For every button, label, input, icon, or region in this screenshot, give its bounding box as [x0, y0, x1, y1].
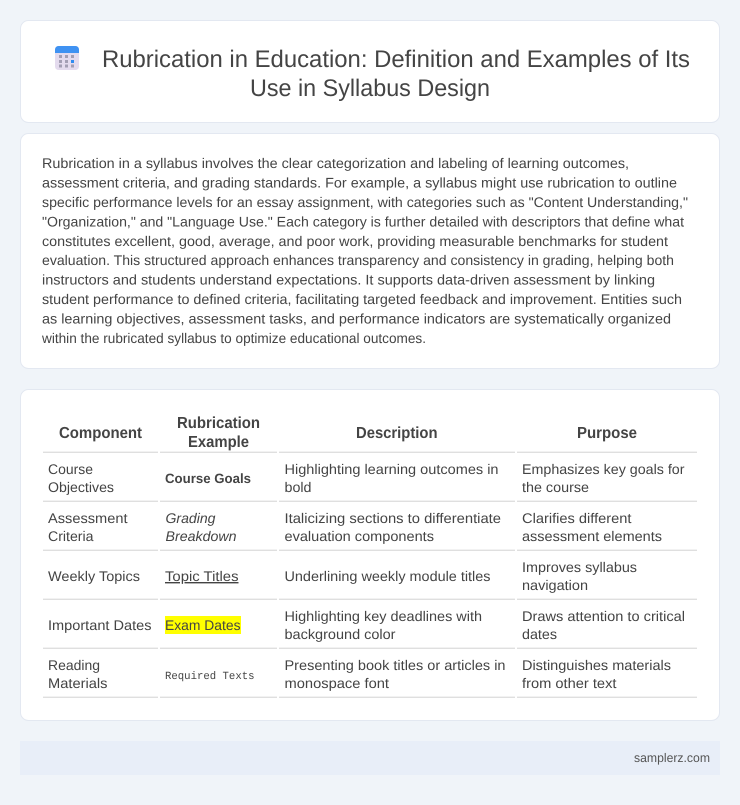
- title: Use in Syllabus Design: [250, 75, 490, 102]
- table row: reading materials: Materials: [48, 675, 108, 691]
- text block: rubrication summary: student performance to defined criteria, facilitating targeted feedback and improvement. Entities such: [42, 291, 682, 307]
- table row: important dates: Exam Dates: [165, 617, 240, 633]
- text block: rubrication summary: specific performance levels for an essay assignment, with categories such as "Content Understanding,": [42, 194, 688, 210]
- table header row: Description: [356, 425, 438, 442]
- table header row: Component: [59, 425, 143, 442]
- table row: assessment criteria: Italicizing sections to differentiate: [284, 510, 501, 526]
- table row: weekly topics: navigation: [522, 577, 588, 593]
- table row: reading materials: Distinguishes materials: [522, 657, 671, 673]
- table row: important dates: Draws attention to critical: [522, 608, 685, 624]
- table row: weekly topics: Weekly Topics: [48, 568, 140, 584]
- title: [102, 46, 690, 102]
- table header row: Example: [188, 434, 249, 451]
- table row: assessment criteria: Assessment: [48, 510, 128, 526]
- panel: header: [20, 20, 720, 122]
- table row: assessment criteria: Breakdown: [166, 528, 237, 544]
- text block: rubrication summary: as learning objectives, assessment tasks, and performance indicators are systematically organized: [42, 311, 671, 327]
- table row: course objectives: the course: [522, 479, 589, 495]
- table row: reading materials: from other text: [522, 675, 617, 691]
- table row: assessment criteria: assessment elements: [522, 528, 662, 544]
- table row: important dates: background color: [284, 626, 396, 642]
- table row: important dates: Highlighting key deadlines with: [284, 608, 482, 624]
- footer source text: samplerz.com: [634, 751, 710, 765]
- panel: rubrication table: [20, 390, 720, 720]
- table row: course objectives: Objectives: [48, 479, 114, 495]
- table row: course objectives: Course: [48, 461, 93, 477]
- table row: course objectives: Emphasizes key goals for: [522, 461, 685, 477]
- footer: [20, 741, 720, 775]
- table row: weekly topics: [43, 559, 697, 600]
- table header row: Rubrication: [177, 415, 260, 432]
- table row: important dates: Important Dates: [48, 617, 152, 633]
- text block: rubrication summary: [41, 155, 688, 346]
- table row: assessment criteria: evaluation components: [284, 528, 434, 544]
- table row: assessment criteria: Grading: [166, 510, 216, 526]
- icon: calendar: [55, 46, 79, 70]
- panel: introduction: [20, 134, 720, 368]
- table row: assessment criteria: Clarifies different: [522, 510, 632, 526]
- text block: rubrication summary: "Organization," and "Language Use." Each category is further detailed with descriptors that define what: [42, 213, 684, 229]
- table row: weekly topics: Underlining weekly module titles: [284, 568, 490, 584]
- table row: assessment criteria: Criteria: [48, 528, 94, 544]
- table header row: [43, 415, 697, 453]
- table row: course objectives: Highlighting learning outcomes in: [284, 461, 498, 477]
- table row: reading materials: [43, 657, 697, 698]
- text block: rubrication summary: constitutes excellent, good, average, and poor work, providing measurable benchmarks for student: [42, 233, 668, 249]
- table header row: Purpose: [577, 425, 637, 442]
- table row: assessment criteria: [43, 510, 697, 551]
- table row: weekly topics: Improves syllabus: [522, 559, 637, 575]
- text block: rubrication summary: instructors and students understand expectations. It supports data-driven assessment by linking: [42, 272, 655, 288]
- table row: reading materials: Required Texts: [165, 671, 254, 683]
- table row: weekly topics: Topic Titles: [165, 568, 238, 584]
- table row: reading materials: Presenting book titles or articles in: [284, 657, 506, 673]
- text block: rubrication summary: within the rubricated syllabus to optimize educational outcomes.: [41, 330, 426, 346]
- table row: important dates: dates: [522, 626, 557, 642]
- text block: rubrication summary: assessment criteria, and grading standards. For example, a syllabus might use rubrication to outline: [42, 174, 677, 190]
- table row: important dates: [43, 608, 697, 649]
- text block: rubrication summary: evaluation. This structured approach enhances transparency and consistency in grading, helping both: [42, 252, 674, 268]
- title: Rubrication in Education: Definition and Examples of Its: [102, 46, 690, 73]
- table row: course objectives: Course Goals: [165, 471, 251, 486]
- table row: course objectives: [43, 461, 697, 502]
- text block: rubrication summary: Rubrication in a syllabus involves the clear categorization and labeling of learning outcomes,: [42, 155, 629, 171]
- table row: course objectives: bold: [284, 479, 312, 495]
- table row: reading materials: Reading: [48, 657, 100, 673]
- table row: reading materials: monospace font: [284, 675, 389, 691]
